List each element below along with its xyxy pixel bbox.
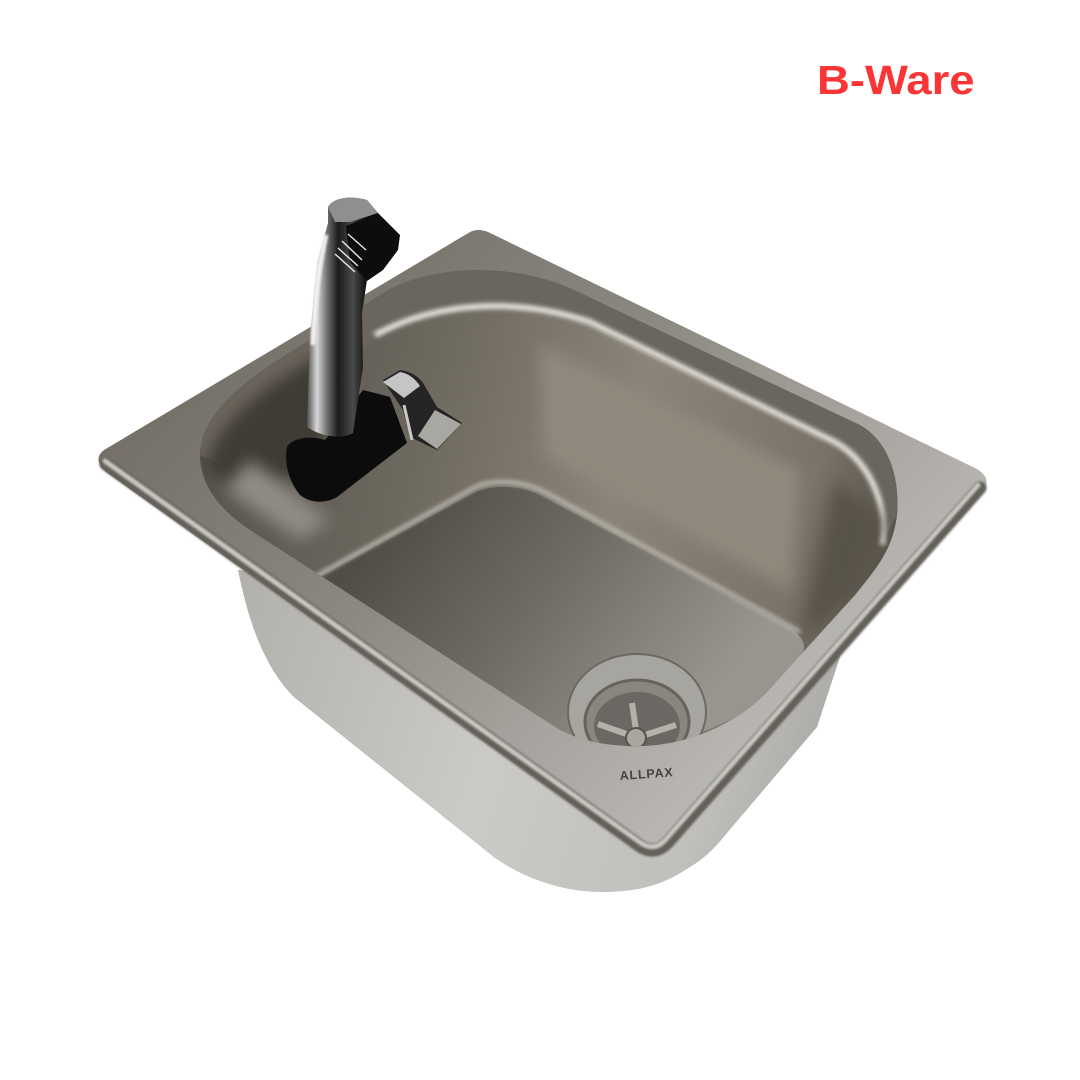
faucet (286, 198, 462, 502)
floor edge highlight (315, 482, 800, 632)
bowl floor (322, 486, 804, 732)
sink rim (98, 230, 987, 856)
label: B-Ware: B-Ware (817, 57, 975, 103)
bowl upper shoulder (200, 270, 898, 545)
left dark wall (202, 352, 328, 485)
ALLPAX logo: ALLPAX (619, 765, 674, 783)
knurl ridges (335, 234, 366, 272)
spout highlight (313, 235, 326, 345)
faucet base drum (286, 390, 407, 502)
right wall shadow (800, 480, 885, 640)
product photo: stainless steel sink with faucet (98, 198, 988, 892)
knurled cap (346, 213, 400, 281)
shoulder highlight (375, 306, 883, 545)
sink outer body (238, 570, 840, 892)
faucet spout (307, 198, 378, 437)
spout head (328, 198, 378, 222)
left lower wall sheen (225, 460, 330, 540)
drain (567, 653, 707, 746)
sink bowl (200, 270, 898, 746)
back wall sheen (540, 345, 800, 590)
faucet lever (383, 370, 462, 450)
